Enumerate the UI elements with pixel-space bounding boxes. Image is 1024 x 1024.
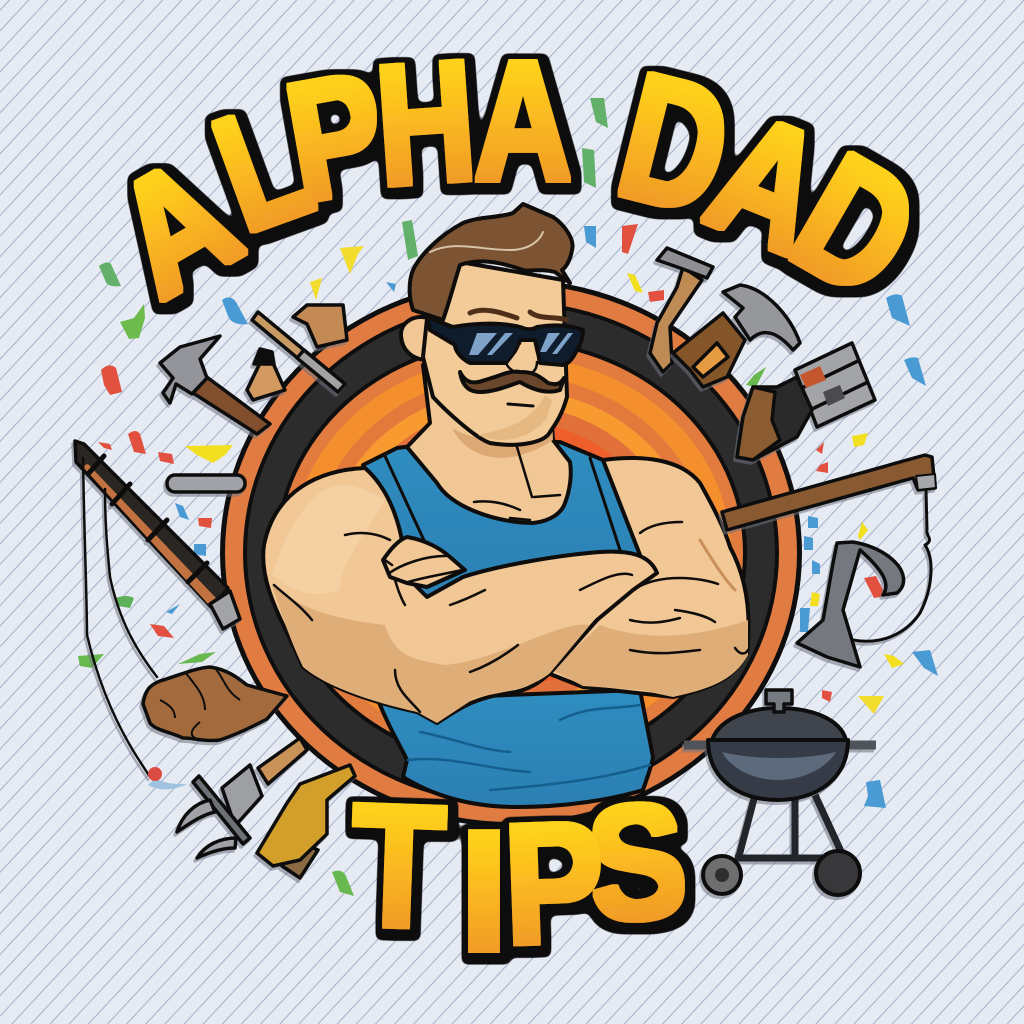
tank top upper [363,442,650,610]
left arm and forearm [263,468,657,723]
icon: fishing rod [75,441,240,777]
title: ALPHA DAD: A [686,76,850,291]
icon: grill [684,690,876,895]
head [401,204,583,445]
title: ALPHA DAD: A [85,121,266,332]
hair [410,204,573,320]
title: ALPHA DAD: P [274,35,398,238]
icon: fist glove [143,667,287,741]
nose [507,344,537,373]
icon: wood handle [252,312,345,392]
mouth [508,404,533,406]
title: TIPS: P [501,787,607,981]
eyebrows [470,310,567,320]
title: TIPS: I [459,796,509,987]
moustache [460,372,564,392]
central circle [220,279,802,827]
title: TIPS [348,766,693,987]
tank top lower body [378,690,653,807]
icon: bobber [148,767,187,789]
title: TIPS: T [348,767,448,965]
sunglasses [427,317,583,365]
jaw shade [478,395,552,440]
title: ALPHA DAD: D [764,117,948,336]
icon: hook axe [650,248,713,372]
hand [383,537,465,587]
title: ALPHA DAD: D [602,34,748,253]
title: ALPHA DAD: H [371,23,481,222]
icon: hammer left [160,336,270,434]
title: ALPHA DAD [85,23,948,336]
icon: power tool and glove [737,343,875,460]
title: TIPS: S [581,766,693,957]
chest and neck [407,365,571,523]
icon: hammer right [673,285,800,387]
tank folds [408,705,650,790]
title: ALPHA DAD: A [474,24,572,217]
title: ALPHA DAD: L [194,67,331,267]
icon: steel bar [167,475,245,492]
icon: hook tool [797,542,904,667]
right arm [545,458,749,697]
confetti [78,98,938,896]
icon: brush [247,349,285,400]
man [263,204,749,807]
icon: wood block [293,305,347,347]
icon: yellow brush [257,765,355,878]
ear [401,317,428,360]
strap seam [385,456,620,575]
chest shading [452,415,553,458]
icon: pliers [177,738,307,858]
face [423,262,567,445]
icon: long handle with line [722,455,936,641]
